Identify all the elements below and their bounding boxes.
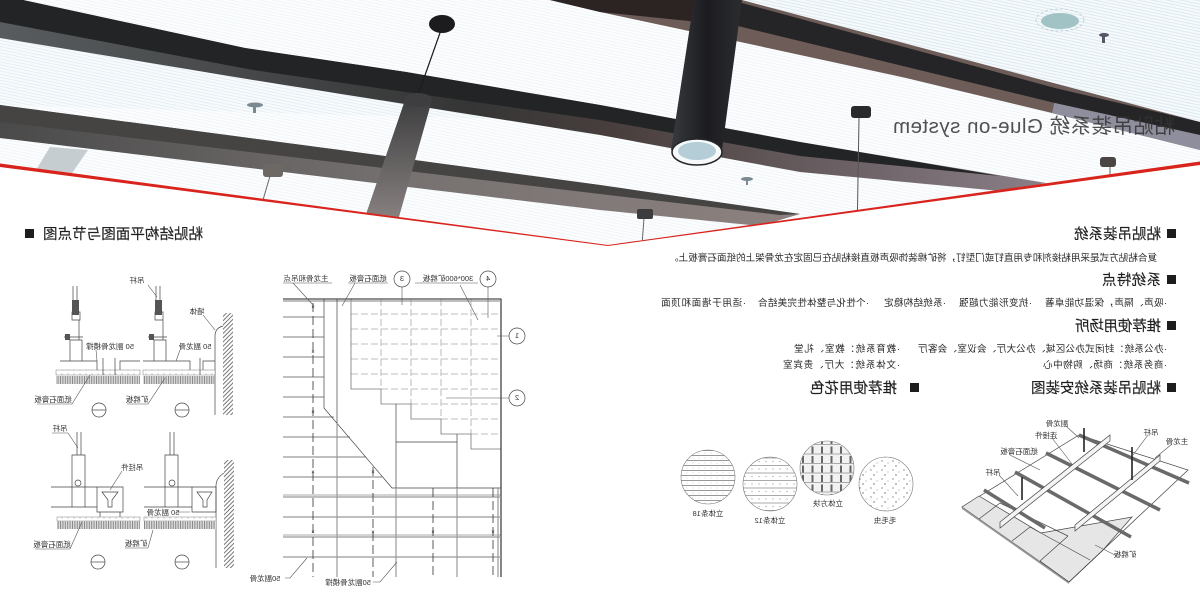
sprinkler heads: [247, 33, 1109, 185]
swatch: 12 stripe: 立体条12: [755, 515, 785, 525]
plan drawing: 1: [515, 331, 519, 340]
plan drawing: 50副龙骨: [250, 573, 280, 583]
heading: plan and node drawings: 粘贴结构平面图与节点图: [43, 226, 203, 243]
plan drawing: [250, 271, 525, 587]
ceiling board plane: [962, 435, 1188, 582]
node details: upper row: 矿棉板: [125, 394, 148, 404]
labels: 副龙骨: [1046, 418, 1068, 428]
title: system name over photo: 粘贴吊装系统 Glue-on system: [893, 115, 1175, 138]
callouts: [35, 433, 190, 549]
boards: [57, 517, 140, 521]
swatch: square block: 立体方块: [813, 498, 843, 508]
text: venue list: ·办公系统：封闭式办公区域、办公大厅、会议室、会客厅: [918, 343, 1167, 355]
hanger detail right: [143, 286, 215, 375]
secondary rails: [283, 317, 382, 477]
node details: lower row: 矿棉板: [124, 538, 147, 548]
plan drawing: 300*600矿棉板: [422, 273, 473, 283]
node details: upper row: [34, 275, 233, 417]
text: venue list: ·商务系统：商场、购物中心: [1043, 359, 1167, 371]
heading: installation drawing: 粘贴吊装系统安装图: [1031, 380, 1161, 397]
text: feature list: [661, 297, 1167, 309]
cross bars: [1000, 435, 1160, 531]
plan drawing: 主龙骨和吊点: [283, 273, 328, 283]
node details: upper row: 50 副龙骨横撑: [86, 341, 134, 351]
node details: lower row: [33, 423, 234, 569]
labels: 吊杆: [985, 467, 1000, 477]
beam: lower: [0, 105, 800, 226]
hanger point marks: ×: [431, 530, 435, 536]
outer border: [283, 299, 501, 577]
node details: lower row: 吊杆: [52, 423, 68, 433]
swatch: 12 stripe: [743, 457, 797, 525]
photo: ceiling with pendant lights: [0, 0, 1200, 250]
labels: 矿棉板: [1113, 549, 1136, 559]
heading: recommended venues: 推荐使用场所: [1075, 318, 1161, 335]
sample swatches: [681, 441, 913, 525]
plan drawing: 4: [486, 274, 490, 283]
text: feature list: ·抗变形能力超强: [959, 297, 1032, 309]
labels: 吊杆: [1143, 427, 1158, 437]
plan drawing: 2: [515, 393, 519, 402]
heading: glue-on system: 粘贴吊装系统: [1074, 226, 1161, 243]
plan drawing: 纸面石膏板: [349, 273, 387, 283]
hanger point marks: ×: [491, 530, 495, 536]
hanger point marks: ×: [311, 410, 315, 416]
plan callouts: [283, 283, 509, 582]
hanger point marks: ×: [371, 530, 375, 536]
node details: upper row: 纸面石膏板: [34, 394, 72, 404]
hanger detail right: [144, 432, 216, 512]
node details: upper row: 50 副龙骨: [179, 341, 211, 351]
hanger point marks: ×: [311, 350, 315, 356]
swatch: 18 stripe: [681, 450, 735, 518]
text: venue list: [783, 343, 1167, 371]
gypsum outline: [324, 299, 501, 488]
swatch: 18 stripe: 立体条18: [693, 508, 723, 518]
speaker disc: [1036, 9, 1084, 31]
swatch: square block: [800, 441, 854, 508]
text: feature list: ·个性化与整体性完美结合: [758, 297, 869, 309]
node details: upper row: 吊杆: [129, 275, 144, 285]
boards: [56, 370, 140, 375]
mineral board tiles: [962, 496, 1132, 582]
text: venue list: ·教育系统：教室、礼堂: [794, 343, 900, 355]
hanger point marks: ×: [311, 530, 315, 536]
heading: recommended patterns: 推荐使用花色: [810, 380, 897, 397]
ceiling grille: [36, 147, 88, 176]
node details: lower row: 纸面石膏板: [33, 539, 71, 549]
hanger point marks: ×: [311, 470, 315, 476]
labels: 主龙骨: [1166, 436, 1188, 446]
white lower background: [0, 163, 1200, 607]
hanger point marks: ×: [371, 470, 375, 476]
wall hatch: [224, 460, 234, 568]
installation isometric drawing: [962, 418, 1189, 584]
text: description: 复合粘贴方式是采用粘接剂和专用直钉或门型钉，将矿棉装饰吸声板直接粘贴在已固定在龙骨架上的纸面石膏板上。: [669, 252, 1157, 264]
hanger detail left: [60, 286, 140, 375]
small pendant wires and canopies: [263, 15, 1116, 245]
text: feature list: ·适用于墙面和顶面: [661, 297, 746, 309]
hanger rods: [1022, 428, 1132, 500]
beam: middle: [0, 0, 1046, 191]
labels: 纸面石膏板: [1000, 446, 1038, 456]
main rails: [984, 435, 1189, 537]
pendant cylinder: left: [364, 93, 432, 224]
labels: 连接件: [1034, 430, 1057, 440]
labels: [985, 418, 1188, 559]
pendant cylinder: centre: [671, 0, 742, 165]
node details: lower row: 吊挂件: [120, 462, 143, 472]
swatch: speckle: [859, 457, 913, 525]
hanger point marks: ×: [311, 305, 315, 311]
swatch: speckle: 毛毛虫: [873, 515, 896, 525]
dashed tile grid: [351, 299, 501, 434]
plan drawing: 50副龙骨横撑: [325, 577, 371, 587]
text: venue list: ·文体系统：大厅、贵宾室: [783, 359, 900, 371]
text: feature list: ·系统结构稳定: [884, 297, 946, 309]
red diagonal line: [0, 162, 1200, 246]
heading: features: 系统特点: [1102, 272, 1161, 289]
vertical carrier rails: [337, 423, 498, 577]
text: feature list: ·吸声、隔声，保温功能卓著: [1045, 297, 1167, 309]
callouts: [37, 285, 215, 404]
hanger point marks: [311, 305, 495, 536]
beam: upper right: [550, 0, 1200, 150]
plan drawing: 3: [400, 274, 404, 283]
node details: lower row: 50 副龙骨: [147, 507, 179, 517]
wall hatch: [223, 313, 233, 415]
panel: system description: [661, 226, 1176, 397]
stepped tile outline: [351, 299, 501, 449]
node details: upper row: 墙体: [189, 306, 204, 316]
hanger detail left: [51, 432, 123, 517]
